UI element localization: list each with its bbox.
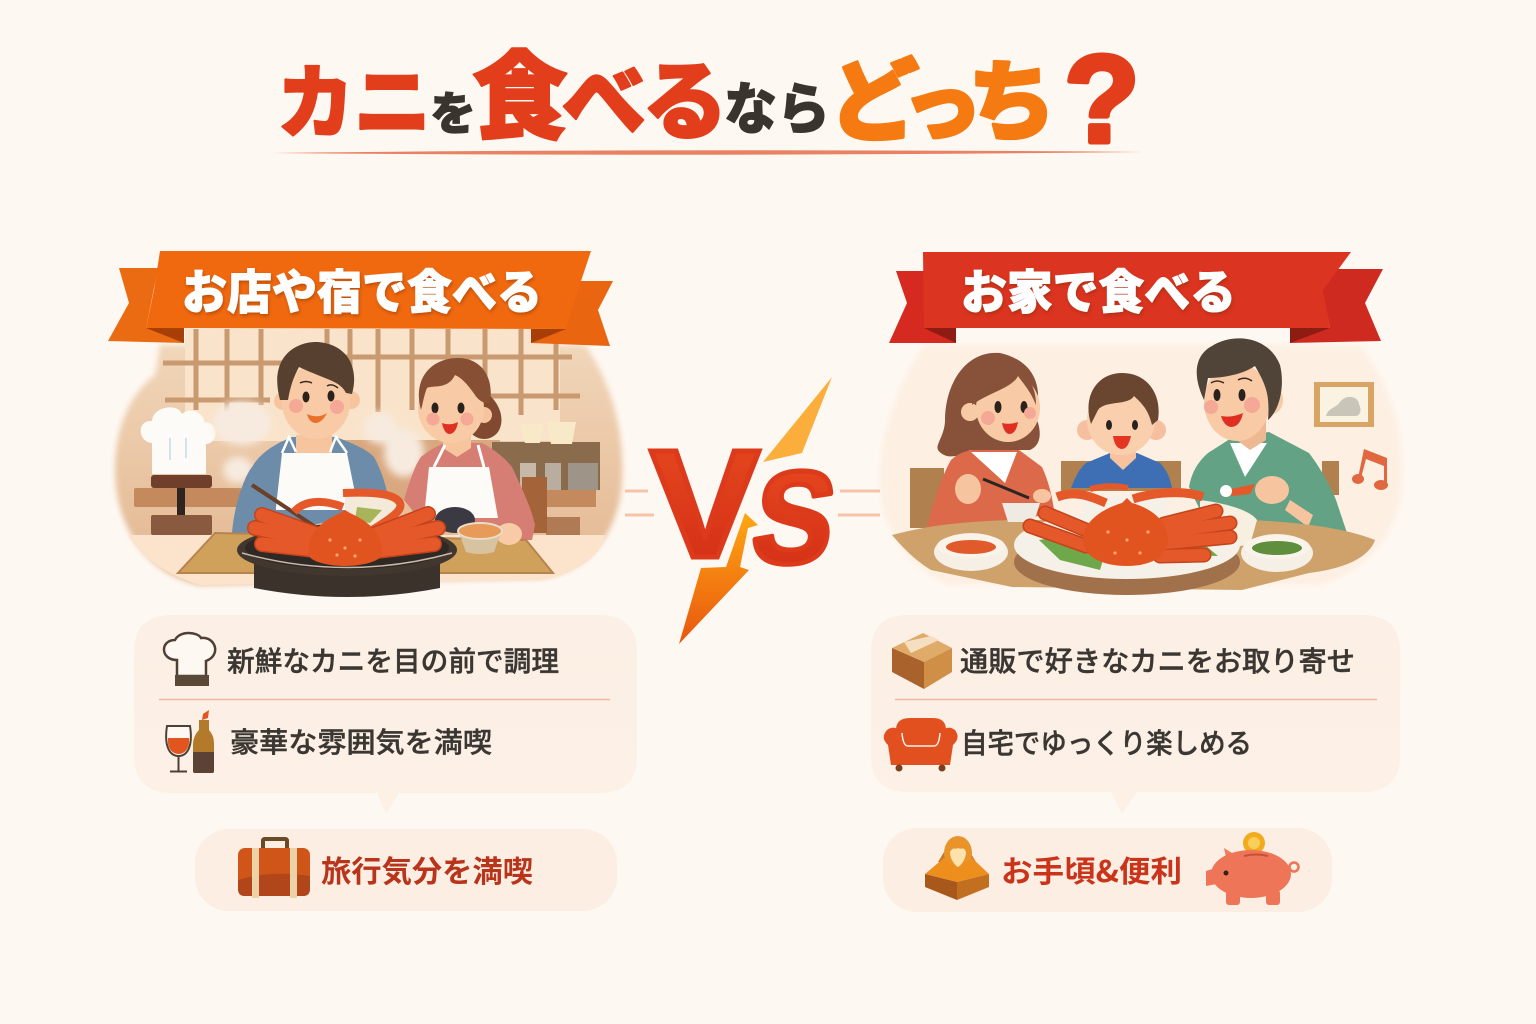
upper lightning <box>763 377 832 462</box>
title: ち <box>968 32 1056 159</box>
divider <box>895 698 1377 700</box>
iron hot plate <box>237 524 457 597</box>
table surface <box>128 535 605 585</box>
feature text: 通販で好きなカニをお取り寄せ <box>960 640 1355 680</box>
left side bowl <box>934 533 1008 571</box>
chopsticks <box>252 485 320 530</box>
picture frame <box>1314 382 1374 427</box>
lower lightning <box>679 513 758 644</box>
feature text: 自宅でゆっくり楽しめる <box>961 722 1252 762</box>
left table <box>134 488 242 507</box>
title: ? <box>1064 31 1140 169</box>
right scene: home <box>880 338 1402 595</box>
icon: sofa <box>884 718 958 772</box>
title: なら <box>724 65 830 146</box>
feature text: 新鮮なカニを目の前で調理 <box>227 640 559 680</box>
right pill: affordable and convenient <box>883 828 1332 912</box>
speech bubble <box>871 615 1400 814</box>
ribbon folds <box>924 328 956 343</box>
VS lettering: V <box>650 418 760 590</box>
back rice bowl <box>1002 503 1040 522</box>
icon: piggy bank <box>1206 832 1298 905</box>
large plate <box>1014 511 1240 595</box>
chef hat decoration <box>141 407 216 474</box>
crab on plate <box>1030 486 1230 566</box>
VS lettering <box>650 418 845 592</box>
left panel: features <box>134 615 637 814</box>
title: っ <box>902 42 982 158</box>
feature text: 豪華な雰囲気を満喫 <box>230 721 492 761</box>
woman in pink cardigan <box>404 358 535 540</box>
man in green shirt <box>1189 338 1347 533</box>
scene backdrop <box>880 345 1402 585</box>
left pill: travel mood <box>195 829 617 911</box>
crab <box>255 493 438 566</box>
side plate right <box>1200 500 1257 550</box>
title: べ <box>562 35 646 156</box>
VS lettering: S <box>744 445 845 592</box>
title: 食 <box>472 20 568 159</box>
left ribbon banner <box>108 251 613 346</box>
ribbon front <box>923 252 1351 328</box>
divider <box>159 698 610 700</box>
VS lettering: S <box>744 445 845 592</box>
stool <box>151 475 212 535</box>
child in blue hoodie <box>1071 373 1172 488</box>
pill text: お手頃&便利 <box>1001 847 1182 891</box>
right ribbon banner <box>889 252 1383 343</box>
speed lines <box>625 491 880 515</box>
icon: cardboard box <box>892 633 952 689</box>
man in blue shirt <box>232 342 390 533</box>
ribbon heading: お店や宿で食べる <box>182 254 542 323</box>
woman with chopsticks <box>927 353 1054 528</box>
counter and wall lower <box>330 440 500 500</box>
ribbon front <box>146 251 591 329</box>
pill text: 旅行気分を満喫 <box>321 847 533 891</box>
dining table <box>892 520 1375 590</box>
ribbon left tail <box>889 271 956 343</box>
icon: gift box with heart <box>925 836 989 900</box>
chairs <box>910 461 1339 528</box>
ribbon folds <box>146 328 184 343</box>
right side table <box>546 490 596 507</box>
ribbon left tail <box>108 268 184 343</box>
shelf <box>492 422 600 490</box>
dark bowl <box>435 507 475 533</box>
right side bowl <box>1241 534 1313 572</box>
icon: wine glass and bottle <box>166 710 214 773</box>
right panel: features <box>871 615 1400 814</box>
title: る <box>642 32 728 157</box>
title <box>277 20 1140 169</box>
icon: suitcase <box>238 839 310 898</box>
music note <box>1352 449 1388 490</box>
title: を <box>430 78 476 144</box>
VS emblem <box>625 377 880 644</box>
speech bubble <box>134 615 637 814</box>
ribbon right tail <box>531 281 613 346</box>
soup cup <box>458 523 502 554</box>
scene backdrop <box>115 345 622 585</box>
shoji window <box>163 329 580 441</box>
title: ど <box>829 29 919 159</box>
ribbon right tail <box>1290 269 1383 343</box>
left scene: restaurant <box>115 329 622 597</box>
placemat <box>178 533 553 573</box>
title: カニ <box>277 39 431 155</box>
hand <box>496 523 522 545</box>
steam <box>213 401 424 483</box>
VS lettering: V <box>650 418 760 590</box>
icon: chef hat <box>164 633 215 686</box>
title underline <box>272 150 1143 155</box>
ribbon heading: お家で食べる <box>961 254 1236 323</box>
